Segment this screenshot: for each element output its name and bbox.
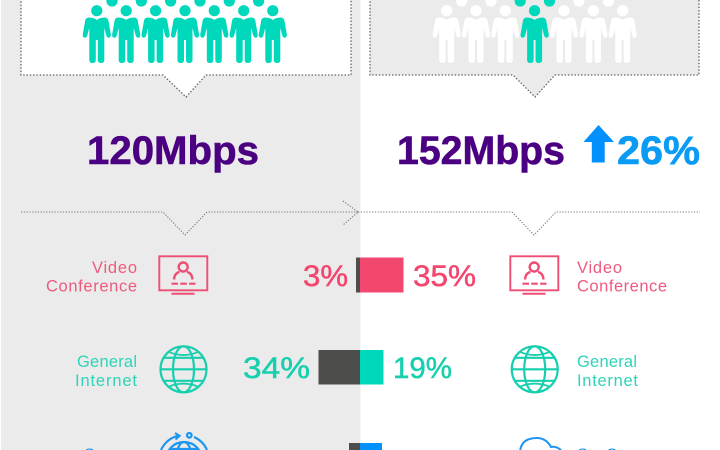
dotted arrow divider [21,201,700,235]
left speech box: current users [21,0,351,97]
left panel background [1,0,360,450]
increase percentage: 26% [617,129,700,173]
people icons: future users (one teal highlighted) [433,0,637,63]
left speed value: 120Mbps [87,129,259,173]
label: video conference left: Video [92,259,137,277]
icon: video conference right [510,256,558,294]
label: general internet left: General [77,353,137,371]
label: video conference right: Conference [577,278,667,296]
row: general internet [75,346,638,392]
value: 34 percent: 34% [243,352,310,385]
bar: general internet [318,350,384,384]
people icons: current users (all teal) [83,0,287,63]
label: general internet left: Internet [75,372,137,390]
value: 19 percent: 19% [393,352,452,385]
bar: third category [349,443,382,450]
row: video conference [46,256,667,296]
bar: video conference [356,258,404,292]
label: video conference right: Video [577,259,622,277]
icon: globe with arrows [161,433,207,450]
row: cut-off third category [84,433,617,450]
value: 3 percent: 3% [303,260,348,293]
icon: cloud [520,438,561,450]
label: video conference left: Conference [46,278,137,296]
arrow: up increase [584,125,614,162]
label: general internet right: General [577,353,637,371]
right speed value: 152Mbps [397,129,565,173]
value: 35 percent: 35% [413,260,476,293]
icon: video conference left [159,256,207,294]
icon: globe right [512,346,558,392]
icon: globe left [160,346,206,392]
label: general internet right: Internet [577,372,638,390]
right speech box: future users [370,0,699,97]
